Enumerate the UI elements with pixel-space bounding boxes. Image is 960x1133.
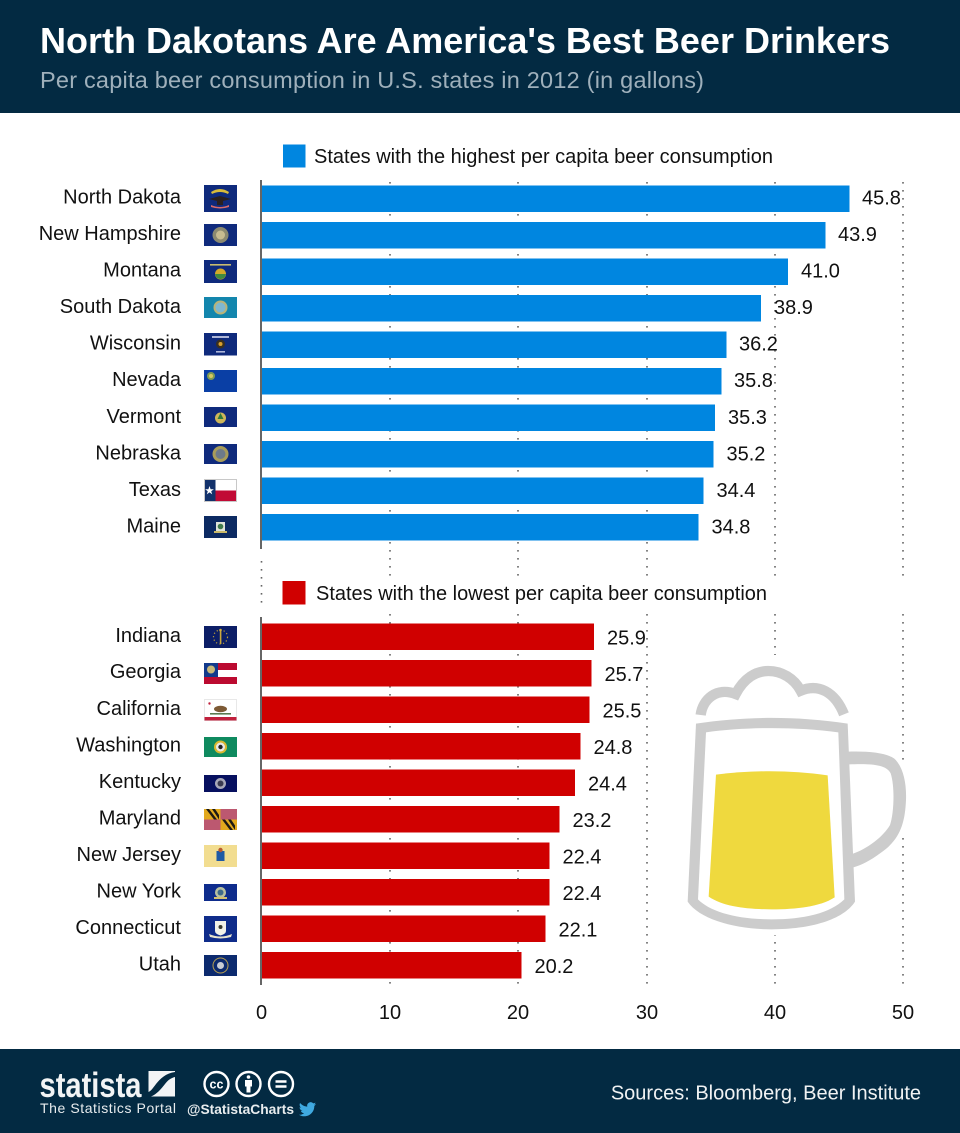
flag: Wisconsin <box>204 333 237 356</box>
header band <box>0 0 960 113</box>
row: Nevada: Nevada <box>112 369 182 391</box>
row: Connecticut: Connecticut <box>75 917 181 939</box>
row: Connecticut <box>75 916 597 942</box>
source note: Sources: Bloomberg, Beer Institute <box>611 1082 921 1104</box>
flags column <box>204 185 237 976</box>
flag: New Jersey <box>204 845 237 867</box>
row: New York: New York <box>96 880 182 902</box>
flag: Kentucky <box>204 775 237 792</box>
flag: Montana <box>204 260 237 283</box>
row: Washington <box>76 733 632 760</box>
flag: Maryland <box>204 809 237 830</box>
row: Montana: 41.0 <box>801 260 840 282</box>
flag: Vermont <box>204 407 237 427</box>
row: Wisconsin: 36.2 <box>739 334 778 356</box>
logo mark <box>148 1071 175 1096</box>
icon: beer mug <box>688 671 906 929</box>
row: Georgia <box>110 660 643 686</box>
mug foam <box>701 671 844 715</box>
row: Indiana: Indiana <box>115 625 182 647</box>
legend: highest consumption: States with the highest per capita beer consumption <box>314 146 773 168</box>
row: Washington: 24.8 <box>594 737 632 759</box>
row: Kentucky: 24.4 <box>588 774 627 796</box>
row: Washington: Washington <box>76 734 181 756</box>
x axis labels: 30 <box>636 1002 658 1024</box>
panel: lowest consumption bar chart <box>75 617 646 985</box>
icon: twitter bird <box>299 1102 316 1116</box>
row: Wisconsin <box>90 332 778 358</box>
row: Maryland <box>99 806 611 832</box>
row: Kentucky: Kentucky <box>99 771 181 793</box>
row: Vermont <box>107 404 767 431</box>
row: Montana: Montana <box>103 260 182 282</box>
flag: Maine <box>204 516 237 538</box>
flag: Washington <box>204 737 237 757</box>
footer band <box>0 1049 960 1133</box>
x axis labels: 40 <box>764 1002 786 1024</box>
row: Maryland: Maryland <box>99 808 181 830</box>
row: Maine: Maine <box>127 516 181 538</box>
subtitle: Per capita beer consumption in U.S. states in 2012 (in gallons) <box>40 67 704 93</box>
x axis labels: 50 <box>892 1002 914 1024</box>
flag: Indiana <box>204 626 237 648</box>
row: South Dakota <box>60 295 813 322</box>
logo tagline: The Statistics Portal <box>40 1100 176 1116</box>
row: Nevada: 35.8 <box>734 370 773 392</box>
row: Utah: Utah <box>139 954 181 976</box>
row: California: 25.5 <box>602 700 641 722</box>
row: South Dakota: South Dakota <box>60 296 182 318</box>
flag: New Hampshire <box>204 224 237 246</box>
row: New Hampshire <box>39 222 877 248</box>
x axis labels: 20 <box>507 1002 529 1024</box>
row: Nebraska: 35.2 <box>726 444 765 466</box>
panel: highest consumption bar chart <box>39 180 901 549</box>
row: Indiana <box>115 624 646 650</box>
row: Nebraska <box>95 441 765 468</box>
icons: creative commons <box>204 1072 293 1096</box>
row: Indiana: 25.9 <box>607 628 646 650</box>
row: New Hampshire: 43.9 <box>838 224 877 246</box>
axis line: lower <box>260 617 262 985</box>
logo: statista: statista <box>40 1066 142 1105</box>
icons: creative commons: cc <box>210 1078 223 1092</box>
row: Georgia: 25.7 <box>604 664 643 686</box>
row: California <box>97 696 641 723</box>
mug body <box>688 718 855 929</box>
row: Kentucky <box>99 770 627 796</box>
row: Montana <box>103 258 840 285</box>
x axis labels <box>256 1002 914 1024</box>
flag: Georgia <box>204 663 237 684</box>
row: South Dakota: 38.9 <box>774 297 813 319</box>
title: North Dakotans Are America's Best Beer Drinkers <box>40 20 890 61</box>
row: Maine: 34.8 <box>712 516 750 538</box>
flag: Nevada <box>204 370 237 392</box>
flag: Texas <box>204 479 237 502</box>
row: Utah: 20.2 <box>534 956 573 978</box>
mug handle <box>848 752 906 867</box>
row: Maine <box>127 514 750 540</box>
axis line: upper <box>260 180 262 549</box>
row: North Dakota <box>63 186 901 212</box>
row: New Jersey: 22.4 <box>562 846 601 868</box>
flag: Utah <box>204 955 237 976</box>
flag: Nebraska <box>204 444 237 464</box>
row: Nebraska: Nebraska <box>95 442 182 464</box>
row: Georgia: Georgia <box>110 661 182 683</box>
x axis labels: 0 <box>256 1002 267 1024</box>
row: Texas: 34.4 <box>716 480 755 502</box>
flag: New York <box>204 884 237 901</box>
row: California: California <box>97 698 182 720</box>
flag: Connecticut <box>204 916 237 942</box>
row: New Hampshire: New Hampshire <box>39 223 181 245</box>
flag: South Dakota <box>204 297 237 318</box>
row: New Jersey: New Jersey <box>77 844 181 866</box>
row: New York <box>96 879 601 906</box>
row: Vermont: Vermont <box>107 406 181 428</box>
row: Utah <box>139 952 573 978</box>
mug beer <box>709 771 835 909</box>
row: New Jersey <box>77 842 601 869</box>
flag: California <box>204 699 237 721</box>
twitter handle: @StatistaCharts <box>187 1102 294 1117</box>
row: Wisconsin: Wisconsin <box>90 332 181 354</box>
flag: North Dakota <box>204 185 237 212</box>
row: Nevada <box>112 368 773 394</box>
row: North Dakota: North Dakota <box>63 186 182 208</box>
row: New York: 22.4 <box>562 883 601 905</box>
row: Texas <box>129 478 755 504</box>
row: Vermont: 35.3 <box>728 407 767 429</box>
row: Maryland: 23.2 <box>572 810 611 832</box>
row: North Dakota: 45.8 <box>862 188 901 210</box>
legend: lowest consumption: States with the lowest per capita beer consumption <box>316 583 767 605</box>
row: Texas: Texas <box>129 479 181 501</box>
row: Connecticut: 22.1 <box>558 920 597 942</box>
x axis labels: 10 <box>379 1002 401 1024</box>
